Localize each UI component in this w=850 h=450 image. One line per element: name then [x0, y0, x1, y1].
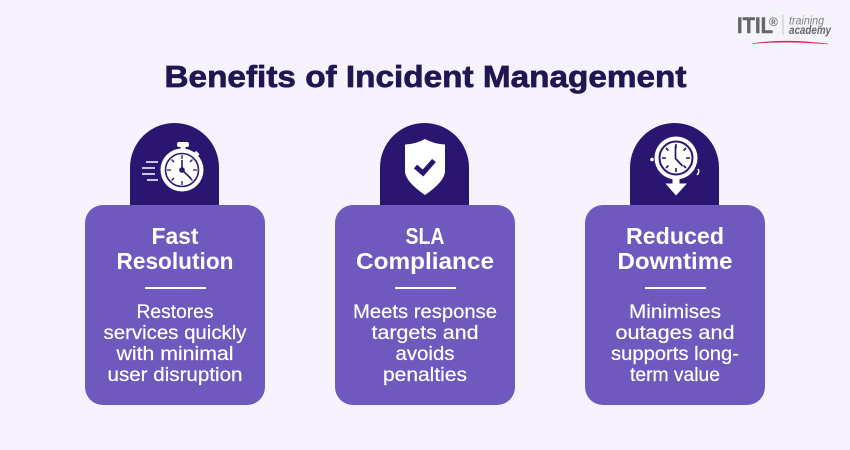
panel: SLA Compliance — [335, 123, 515, 405]
card heading: Compliance — [356, 248, 494, 274]
card body text: targets and — [372, 323, 478, 344]
logo: ITIL training academy: ITIL — [737, 13, 773, 38]
logo: ITIL training academy — [737, 13, 832, 44]
card body text — [353, 302, 497, 386]
card body text: avoids — [396, 344, 454, 365]
card background — [335, 205, 515, 405]
card body text: with minimal — [115, 344, 234, 365]
card body text: user disruption — [108, 365, 242, 386]
card body text: Restores — [136, 302, 214, 323]
logo: ITIL training academy: ® — [769, 15, 778, 29]
card heading: Reduced — [626, 223, 724, 249]
card body text — [104, 302, 247, 386]
logo: ITIL training academy: academy — [789, 23, 832, 37]
card heading — [618, 223, 732, 274]
logo: ITIL training academy: training — [789, 14, 824, 28]
card body text: outages and — [616, 323, 734, 344]
card background — [585, 205, 765, 405]
card heading: Fast — [152, 223, 199, 249]
panel: Reduced Downtime — [585, 123, 765, 405]
card background — [85, 205, 265, 405]
card body text: services quickly — [104, 323, 247, 344]
card body text: supports long- — [611, 344, 739, 365]
card body text: penalties — [383, 365, 467, 386]
card body text — [611, 302, 739, 386]
card heading: Resolution — [116, 248, 234, 274]
icon tab: shield with check — [380, 123, 469, 206]
card heading — [116, 223, 234, 274]
card heading — [356, 223, 494, 274]
card body text: term value — [630, 365, 720, 386]
title: Benefits of Incident Management — [164, 59, 686, 94]
card body text: Meets response — [353, 302, 497, 323]
panel: Fast Resolution — [85, 123, 265, 405]
icon tab: clock with down arrow — [630, 123, 719, 206]
card heading: SLA — [406, 223, 444, 249]
card heading: Downtime — [618, 248, 732, 274]
card body text: Minimises — [629, 302, 721, 323]
icon tab: stopwatch — [130, 123, 219, 206]
